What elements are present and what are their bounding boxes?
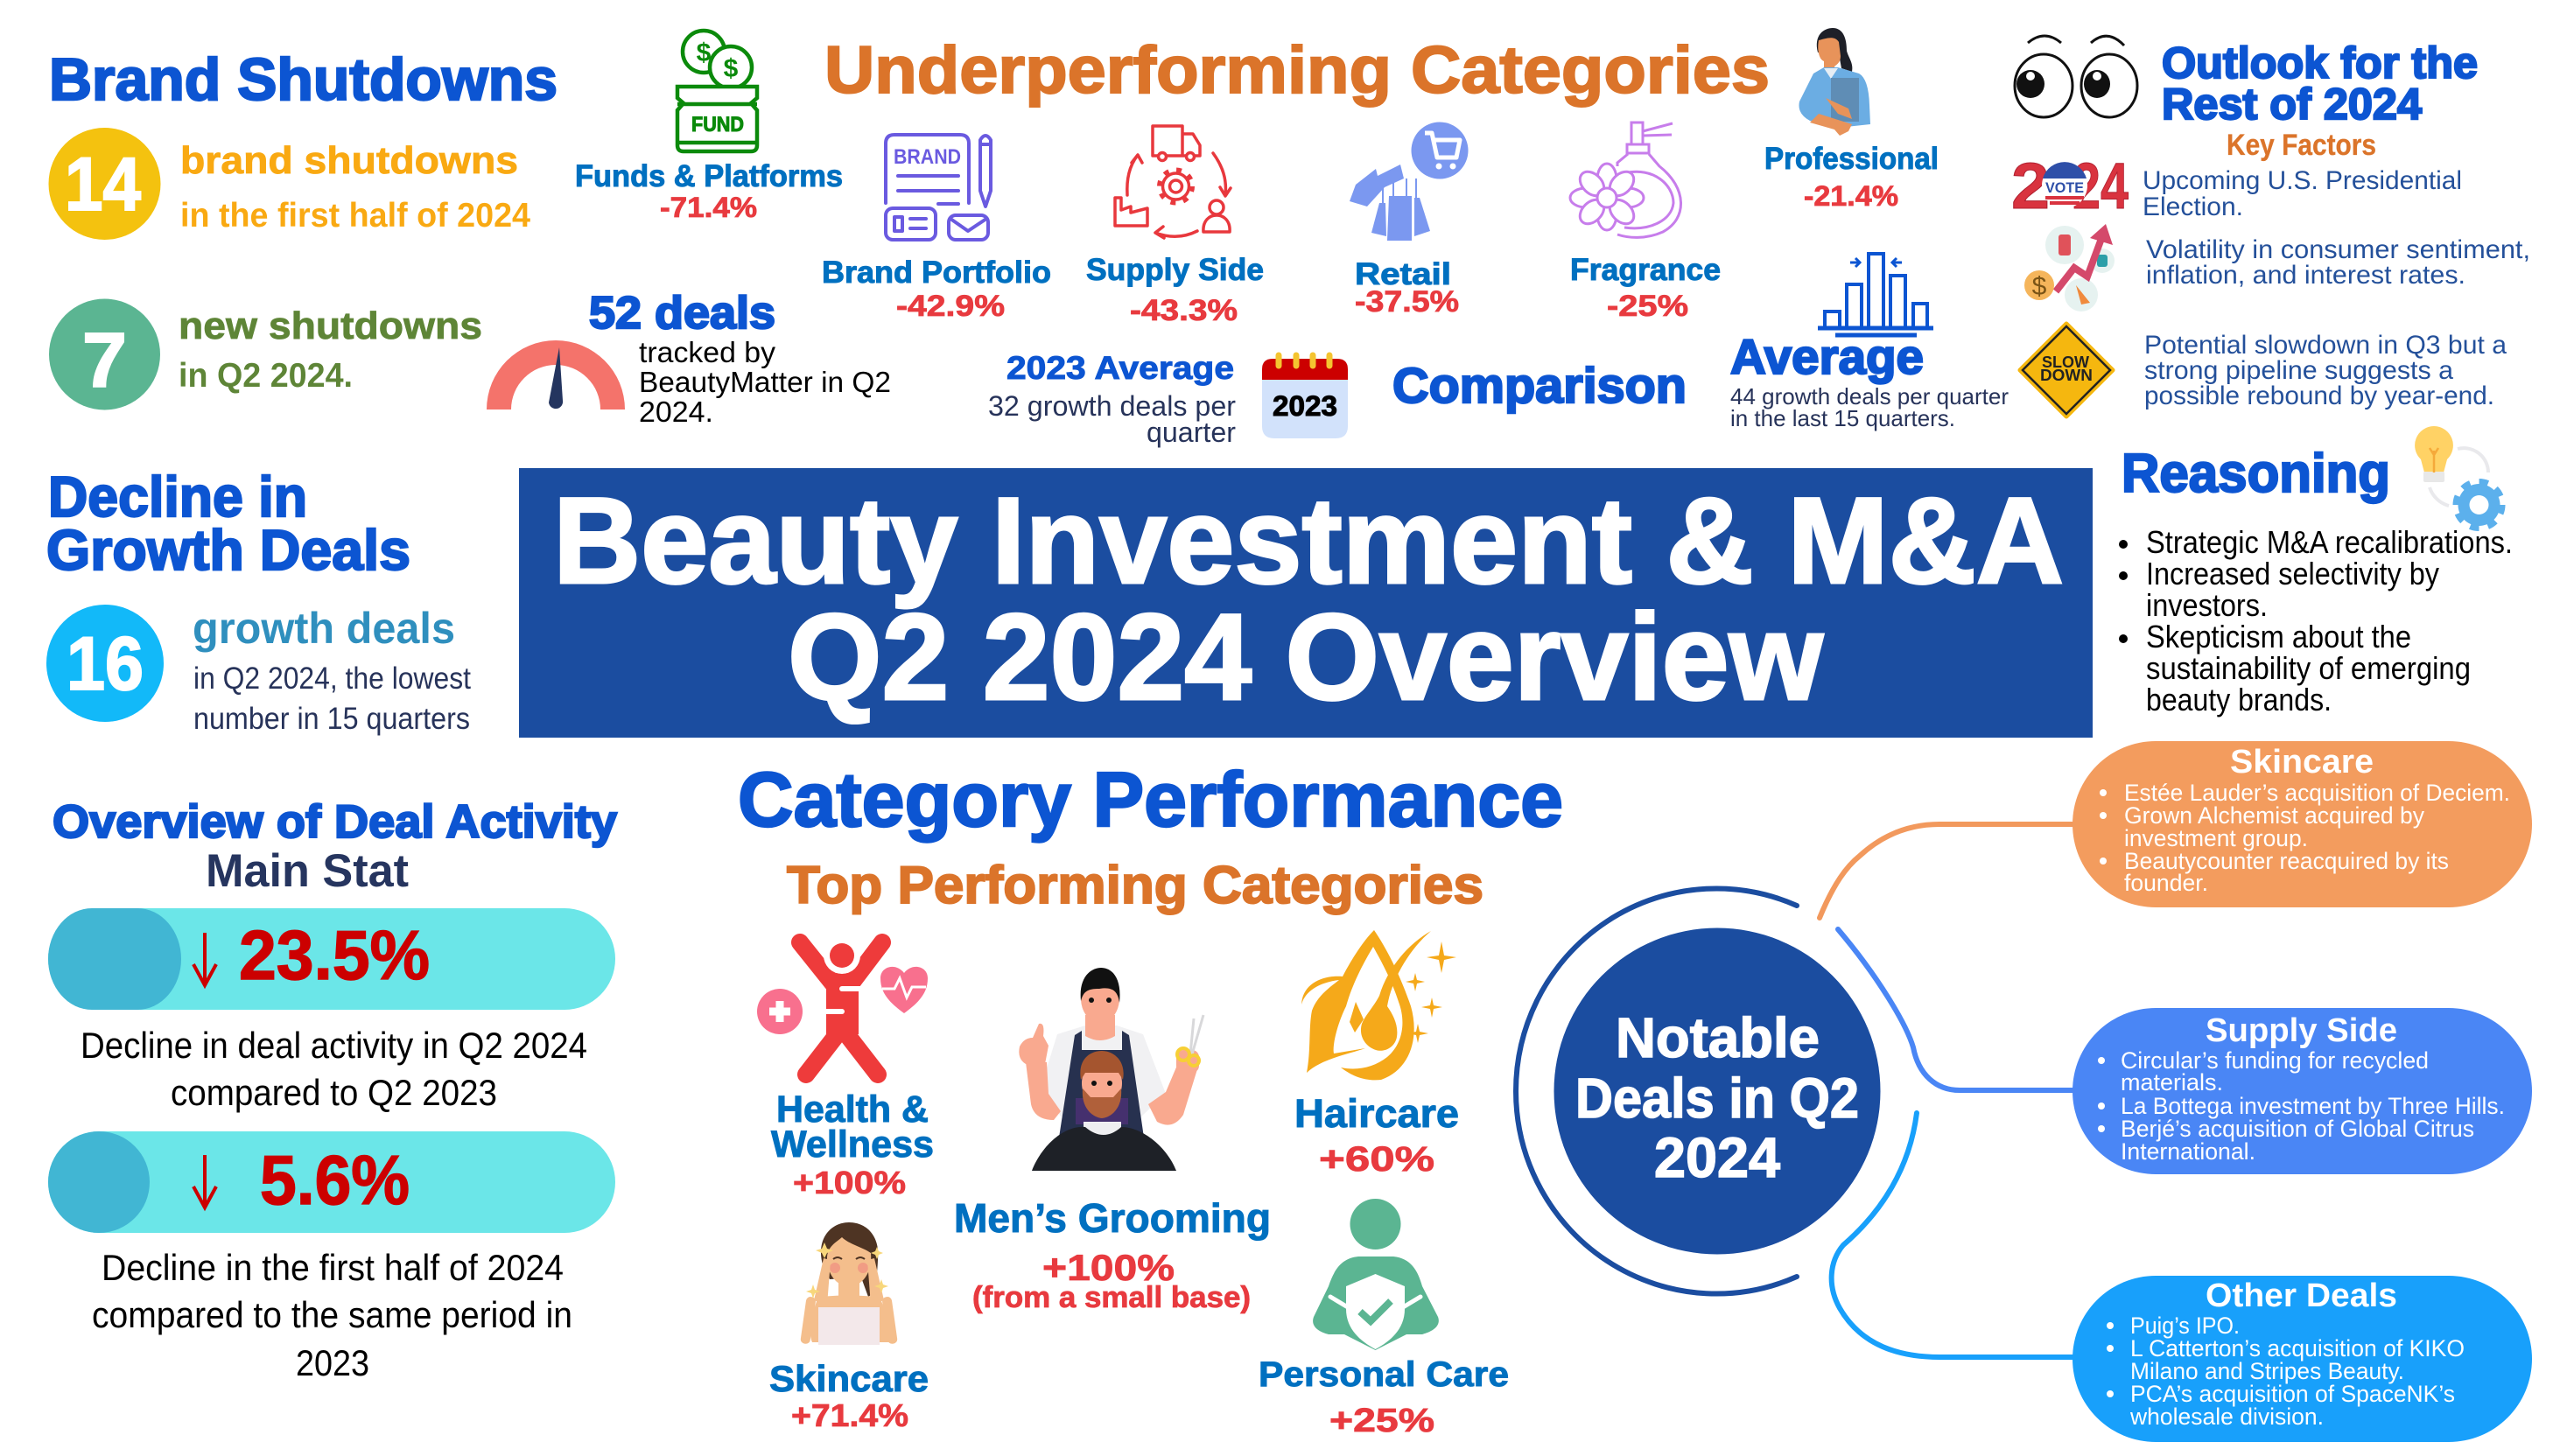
icon: supply cycle xyxy=(1115,126,1231,238)
icon: person with shield xyxy=(1313,1199,1439,1350)
text: presidential election: Election. xyxy=(2143,192,2243,221)
heading: decline in growth deals xyxy=(46,465,410,582)
text: potential slowdown xyxy=(2144,331,2507,410)
stat pill: 23.5%: 23.5% xyxy=(239,916,430,994)
stat: 14 brand shutdowns: 14 xyxy=(65,143,141,227)
stat: 16 growth deals: 16 xyxy=(67,622,144,706)
category: fragrance xyxy=(1570,122,1721,323)
heading: comparison: Comparison xyxy=(1392,358,1687,414)
category: haircare: +60% xyxy=(1319,1140,1434,1179)
icon: eyes xyxy=(2015,36,2137,117)
icon: barber and client xyxy=(1019,968,1203,1171)
icon: health figure xyxy=(757,937,928,1074)
category: professional xyxy=(1764,28,1939,212)
circle: notable deals in q2 2024: Notable xyxy=(1616,1006,1820,1069)
category: retail: -37.5% xyxy=(1355,285,1459,318)
panel: category performance xyxy=(738,756,1563,1439)
text: 2023 average xyxy=(988,350,1236,448)
card: supply side deals: Berjé’s acquisition of Global Citrus xyxy=(2121,1116,2474,1142)
card: other deals: Puig’s IPO. xyxy=(2130,1312,2240,1339)
category: skincare xyxy=(769,1222,929,1433)
icon: fund jar: $ xyxy=(697,38,712,67)
list: reasons: investors. xyxy=(2146,587,2268,623)
icon: slow down sign xyxy=(2020,324,2113,416)
title banner: Beauty Investment & M&A xyxy=(553,472,2064,609)
icon: 2023 calendar: 2023 xyxy=(1273,390,1337,422)
heading: outlook xyxy=(2162,38,2478,129)
category: men's grooming xyxy=(954,968,1271,1314)
heading: reasoning: Reasoning xyxy=(2122,444,2390,504)
icon: vote 2024: 2 xyxy=(2011,150,2050,222)
circle: notable deals in q2 2024: Deals in Q2 xyxy=(1575,1067,1859,1130)
category: personal care: +25% xyxy=(1329,1403,1434,1439)
text: average: Average xyxy=(1730,329,1924,384)
title banner xyxy=(519,468,2093,738)
icon: average bars xyxy=(1818,254,1933,335)
stat: 14 brand shutdowns: brand shutdowns xyxy=(180,139,518,182)
icon: hair drop xyxy=(1301,930,1456,1080)
text: potential slowdown: possible rebound by year-end. xyxy=(2144,382,2494,410)
card: other deals: L Catterton’s acquisition of KIKO xyxy=(2130,1335,2465,1362)
category: professional: Professional xyxy=(1764,142,1939,176)
card: supply side deals xyxy=(2073,1008,2532,1174)
heading: underperforming categories: Underperforming Categories xyxy=(824,33,1770,108)
panel: underperforming categories xyxy=(575,28,1939,327)
card: supply side deals: International. xyxy=(2121,1138,2255,1165)
category: retail xyxy=(1350,122,1469,318)
category: supply side xyxy=(1086,126,1264,327)
category: haircare: Haircare xyxy=(1294,1091,1459,1136)
list: reasons: Increased selectivity by xyxy=(2146,556,2439,592)
panel: brand shutdowns xyxy=(49,46,558,410)
text: presidential election: Upcoming U.S. Presidential xyxy=(2143,166,2462,195)
text: average xyxy=(1730,329,2009,431)
text: 2023 average: quarter xyxy=(1147,416,1236,448)
text: tracked by BeautyMatter: 2024. xyxy=(639,396,713,428)
category: funds and platforms: -71.4% xyxy=(660,192,757,223)
category: fragrance: -25% xyxy=(1607,290,1688,323)
stat pill: 5.6%: 5.6% xyxy=(260,1141,410,1219)
icon: 2023 calendar xyxy=(1262,355,1348,438)
connector: skincare xyxy=(1820,824,2074,918)
list: reasons xyxy=(2119,524,2513,718)
card: skincare deals: Grown Alchemist acquired by xyxy=(2124,802,2424,829)
list: reasons: beauty brands. xyxy=(2146,682,2332,718)
text: volatility: inflation, and interest rates. xyxy=(2146,261,2465,290)
list: reasons: Strategic M&A recalibrations. xyxy=(2146,524,2513,560)
circle: notable deals in q2 2024: 2024 xyxy=(1654,1126,1780,1189)
text: 2023 average: 32 growth deals per xyxy=(988,390,1236,422)
panel: 52 deals gauge xyxy=(487,288,891,428)
circle: notable deals in q2 2024 xyxy=(1554,928,1880,1255)
icon: woman with glowing skin xyxy=(800,1222,898,1345)
category: health and wellness: +100% xyxy=(793,1165,906,1200)
card: skincare deals: Beautycounter reacquired by its xyxy=(2124,848,2449,874)
icon: fund jar xyxy=(677,31,757,151)
icon: retail hand with bags and cart xyxy=(1350,122,1469,241)
card: other deals xyxy=(2073,1276,2532,1442)
category: skincare: +71.4% xyxy=(791,1397,908,1433)
category: health and wellness xyxy=(757,937,934,1200)
list: reasons: sustainability of emerging xyxy=(2146,650,2471,686)
icon: volatility arrow xyxy=(2024,224,2115,312)
connector: supply side xyxy=(1838,929,2074,1090)
card: other deals: Other Deals xyxy=(2206,1278,2397,1314)
category: supply side: -43.3% xyxy=(1130,294,1238,327)
card: skincare deals xyxy=(2073,741,2532,907)
stat: 7 new shutdowns: new shutdowns xyxy=(179,304,482,347)
category: brand portfolio: Brand Portfolio xyxy=(822,256,1051,290)
text: average: in the last 15 quarters. xyxy=(1730,405,1955,431)
category: skincare: Skincare xyxy=(769,1358,929,1399)
heading: outlook: Rest of 2024 xyxy=(2162,80,2422,129)
card: supply side deals: materials. xyxy=(2121,1069,2223,1096)
category: personal care: Personal Care xyxy=(1259,1355,1509,1394)
icon: volatility arrow: $ xyxy=(2032,272,2047,301)
category: personal care xyxy=(1259,1199,1509,1439)
category: brand portfolio xyxy=(822,135,1051,323)
title banner: Q2 2024 Overview xyxy=(788,588,1824,725)
text: potential slowdown: Potential slowdown in Q3 but a xyxy=(2144,331,2507,360)
heading: category performance: Category Performance xyxy=(738,756,1563,843)
icon: vote 2024: VOTE xyxy=(2045,179,2084,196)
ring around centre xyxy=(1516,888,1797,1293)
stat: 7 new shutdowns: 7 xyxy=(82,317,127,403)
text: decline in first half: compared to the same period in xyxy=(92,1294,572,1335)
category: fragrance: Fragrance xyxy=(1570,253,1721,287)
icon: vote 2024: 24 xyxy=(2073,150,2129,222)
subheading: main stat: Main Stat xyxy=(206,845,409,897)
heading: brand shutdowns: Brand Shutdowns xyxy=(49,46,558,113)
heading: decline in growth deals: Decline in xyxy=(48,465,307,528)
category: brand portfolio: -42.9% xyxy=(896,290,1005,323)
panel: notable deals xyxy=(1516,741,2532,1442)
category: haircare xyxy=(1294,930,1459,1179)
category: health and wellness: Wellness xyxy=(771,1124,934,1166)
category: men's grooming: (from a small base) xyxy=(972,1281,1251,1314)
category: retail: Retail xyxy=(1355,257,1451,291)
heading: outlook: Outlook for the xyxy=(2162,38,2478,88)
text: tracked by BeautyMatter: tracked by xyxy=(639,336,776,368)
stat: 14 brand shutdowns: in the first half of 2024 xyxy=(180,197,530,234)
card: skincare deals: Estée Lauder’s acquisition of Deciem. xyxy=(2124,780,2510,806)
stat pill: 5.6% xyxy=(48,1131,615,1233)
icon: gauge xyxy=(487,340,625,410)
stat: 7 new shutdowns: in Q2 2024. xyxy=(179,357,353,395)
heading: decline in growth deals: Growth Deals xyxy=(46,518,410,582)
text: 2023 average: 2023 Average xyxy=(1006,350,1234,386)
category: funds and platforms xyxy=(575,31,843,223)
text: decline in first half: Decline in the first half of 2024 xyxy=(102,1247,564,1288)
card: supply side deals: La Bottega investment by Three Hills. xyxy=(2121,1093,2505,1119)
subheading: key factors: Key Factors xyxy=(2227,129,2376,162)
panel: decline in growth deals xyxy=(46,465,471,736)
icon: brand document xyxy=(886,135,991,240)
text: decline in deal activity: compared to Q2 2023 xyxy=(171,1072,497,1113)
text: volatility xyxy=(2146,235,2530,290)
text: presidential election xyxy=(2143,166,2462,221)
stat: 16 growth deals xyxy=(46,604,471,736)
text: average: 44 growth deals per quarter xyxy=(1730,383,2009,410)
stat: 16 growth deals: growth deals xyxy=(193,604,455,653)
card: supply side deals: Circular’s funding for recycled xyxy=(2121,1047,2429,1074)
text: decline in first half: 2023 xyxy=(296,1342,369,1383)
text: tracked by BeautyMatter xyxy=(639,336,891,428)
text: potential slowdown: strong pipeline suggests a xyxy=(2144,356,2453,385)
card: other deals: PCA’s acquisition of SpaceNK’s xyxy=(2130,1381,2455,1407)
stat: 14 brand shutdowns xyxy=(49,128,530,240)
icon: brand document: BRAND xyxy=(894,145,961,169)
text: decline in deal activity xyxy=(81,1025,587,1113)
icon: vote 2024 xyxy=(2011,150,2129,222)
icon: fund jar: $ xyxy=(724,54,739,83)
icon: fund jar: FUND xyxy=(691,113,744,136)
subheading: top performing categories: Top Performing Categories xyxy=(787,856,1483,914)
icon: slow down sign: SLOW xyxy=(2042,354,2089,371)
text: decline in first half xyxy=(92,1247,572,1383)
stat: 7 new shutdowns xyxy=(49,299,482,410)
panel: outlook for the rest of 2024 xyxy=(2011,36,2530,416)
text: volatility: Volatility in consumer sentiment, xyxy=(2146,235,2530,264)
category: professional: -21.4% xyxy=(1804,180,1898,212)
text: decline in deal activity: Decline in deal activity in Q2 2024 xyxy=(81,1025,587,1066)
stat: 16 growth deals: in Q2 2024, the lowest xyxy=(193,662,471,696)
card: skincare deals: investment group. xyxy=(2124,825,2308,851)
icon: slow down sign: DOWN xyxy=(2040,367,2093,384)
stat: 16 growth deals: number in 15 quarters xyxy=(193,702,470,736)
heading: overview of deal activity: Overview of Deal Activity xyxy=(53,796,618,848)
card: skincare deals: Skincare xyxy=(2230,744,2374,780)
panel: comparison xyxy=(988,254,2009,448)
card: other deals: Milano and Stripes Beauty. xyxy=(2130,1358,2404,1384)
list: reasons: Skepticism about the xyxy=(2146,619,2411,654)
stat pill: 23.5% xyxy=(48,908,615,1010)
card: supply side deals: Supply Side xyxy=(2206,1012,2397,1049)
icon: perfume bottle with flower xyxy=(1570,122,1681,237)
category: men's grooming: Men’s Grooming xyxy=(954,1195,1271,1241)
category: supply side: Supply Side xyxy=(1086,253,1264,287)
card: skincare deals: founder. xyxy=(2124,870,2208,896)
panel: reasoning xyxy=(2119,426,2513,718)
panel: overview of deal activity xyxy=(48,796,618,1383)
text: 52 deals: 52 deals xyxy=(589,288,775,339)
category: men's grooming: +100% xyxy=(1042,1247,1175,1288)
icon: professional woman xyxy=(1799,28,1870,136)
card: other deals: wholesale division. xyxy=(2129,1404,2324,1430)
category: health and wellness: Health & xyxy=(776,1088,929,1130)
connector: other deals xyxy=(1832,1113,2074,1357)
category: funds and platforms: Funds & Platforms xyxy=(575,159,843,193)
icon: bulb and gear xyxy=(2415,426,2501,528)
text: tracked by BeautyMatter: BeautyMatter in Q2 xyxy=(639,366,891,398)
